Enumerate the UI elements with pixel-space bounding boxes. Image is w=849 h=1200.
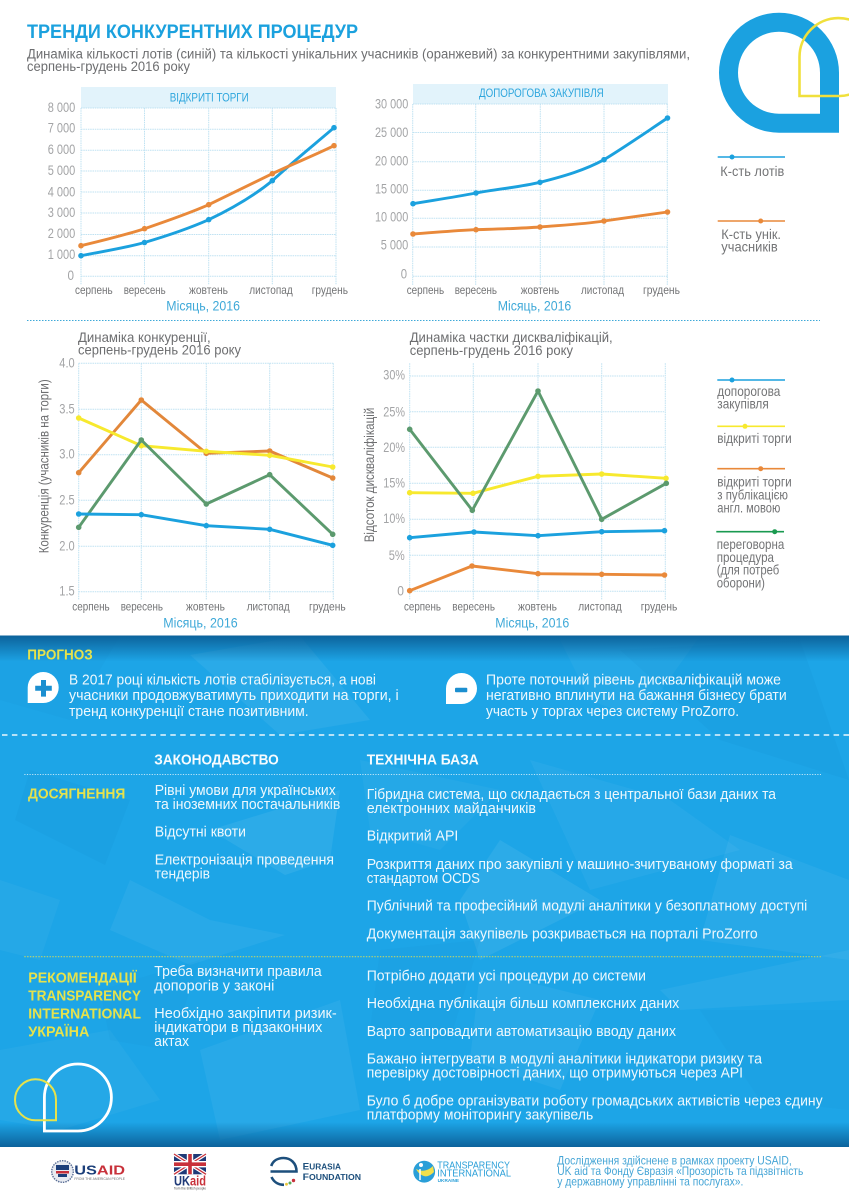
line: open tenders [76,415,336,470]
logo: USAID [52,1161,126,1182]
chart header: open tenders: ВІДКРИТІ ТОРГИ [170,93,249,105]
month labels: серпень [75,284,113,297]
legend item: unique participants: К-сть унік. [721,226,781,242]
achievements: technical base: Гібридна система, що складається з центральної бази даних та [367,787,777,803]
row heading: recommendations: УКРАЇНА [28,1023,89,1040]
recommendations: legislation [154,964,337,1050]
month labels: жовтень [186,601,225,614]
x axis title: Місяць, 2016 [495,615,570,630]
y axis labels: 1.5 [59,583,75,598]
recommendations: legislation: індикатори в підзаконних [154,1020,323,1036]
y axis title: Відсоток дискваліфікацій [362,408,377,542]
chart title: Динаміка конкуренції, [78,329,211,345]
legend item: unique participants [718,218,785,255]
logo: Transparency International Ukraine [413,1160,511,1183]
recommendations: technical base: перевірку достовірності даних, що отримуються через API [367,1066,743,1082]
legend item: open tenders with English publication: англ. мовою [717,499,780,515]
y axis labels [383,367,405,598]
y axis title: Конкуренція (учасників на торги) [37,379,52,553]
logo: blue and yellow drops [719,13,849,133]
forecast negative text [486,672,787,720]
legend: top charts [718,154,785,255]
x axis title: Місяць, 2016 [498,299,572,314]
line: open tenders with English publication [76,397,336,481]
month labels: жовтень [521,284,559,297]
legend item: unique participants: учасників [721,239,778,255]
chart: disqualification share [362,329,677,630]
logo: UK aid: UKaid [174,1173,206,1189]
y axis labels: 30% [383,367,405,382]
month labels: жовтень [518,601,557,614]
recommendations: technical base: Варто запровадити автоматизацію вводу даних [367,1024,677,1040]
line: lots [78,125,337,258]
row heading: achievements: ДОСЯГНЕННЯ [28,785,125,802]
logo: USAID: FROM THE AMERICAN PEOPLE [74,1177,126,1181]
chart title: Динаміка частки дискваліфікацій, [410,329,613,345]
row heading: recommendations: INTERNATIONAL [28,1006,141,1023]
line: below-threshold [407,528,667,540]
legend item: negotiated procedure: оборони) [717,574,765,590]
logo: Transparency International Ukraine: INTERNATIONAL [437,1169,511,1180]
month labels: вересень [121,601,163,614]
funding note [557,1154,803,1188]
forecast negative text: негативно вплинути на бажання бізнесу брати [486,688,787,704]
y axis labels: 3.5 [59,401,75,416]
achievements: technical base [367,787,807,943]
recommendations: legislation: Треба визначити правила [154,964,322,980]
achievements: legislation [155,783,341,882]
y axis labels: 5% [389,548,405,563]
recommendations: legislation: актах [154,1034,190,1050]
month labels: грудень [641,601,677,614]
recommendations: technical base: Необхідна публікація більш комплексних даних [367,996,680,1012]
y axis labels [375,97,408,282]
y axis labels: 6 000 [48,142,75,157]
y axis labels: 10% [383,511,405,526]
x axis title: Місяць, 2016 [163,615,238,630]
achievements: technical base: електронних майданчиків [367,801,536,817]
logo: Eurasia Foundation: EURASIA [303,1162,341,1173]
logo: UK aid [174,1154,206,1191]
line: negotiated procedure [76,437,336,537]
y axis labels: 2.5 [59,492,75,507]
achievements: technical base: Документація закупівель розкривається на порталі ProZorro [367,927,758,943]
column heading: legislation: ЗАКОНОДАВСТВО [154,753,279,769]
chart title: серпень-грудень 2016 року [78,342,241,358]
month labels: вересень [455,284,497,297]
legend: procedures [716,378,792,590]
month labels: вересень [452,601,495,614]
chart: below-threshold procurement [375,84,680,314]
month labels: серпень [407,284,444,297]
achievements: legislation: та іноземних постачальників [155,797,341,813]
y axis labels: 4.0 [59,356,75,371]
y axis labels: 15% [383,475,405,490]
y axis labels: 4 000 [48,184,75,200]
logo: USAID: US AID [74,1162,125,1177]
y axis labels: 20% [383,440,405,455]
column heading: technical base: ТЕХНІЧНА БАЗА [367,753,479,769]
y axis labels: 5 000 [48,163,75,178]
legend item: lots: К-сть лотів [720,163,784,179]
month labels [75,284,348,297]
chart title: серпень-грудень 2016 року [410,342,573,358]
line: lots [410,115,670,206]
legend item: open tenders: відкриті торги [717,430,792,446]
panel: forecast, achievements and recommendations [0,636,849,1147]
line: unique participants [78,143,337,248]
achievements: legislation: Рівні умови для українських [155,783,336,799]
legend item: below-threshold: закупівля [717,396,769,412]
chart title [78,329,241,358]
achievements: legislation: Відсутні квоти [155,825,246,841]
y axis labels: 25 000 [375,125,408,140]
recommendations: technical base: Потрібно додати усі процедури до системи [367,968,646,984]
month labels [404,601,677,614]
month labels: грудень [309,601,346,614]
legend item: below-threshold [717,378,785,412]
subtitle: Динаміка кількості лотів (синій) та кількості унікальних учасників (оранжевий) за конкурентними закупівлями, [27,46,690,62]
legend item: negotiated procedure [716,529,784,590]
recommendations: technical base: платформу моніторингу закупівель [367,1108,593,1124]
month labels: грудень [643,284,680,297]
line: below-threshold [76,511,336,548]
icon: minus [446,673,477,704]
row heading: recommendations: РЕКОМЕНДАЦІЇ [28,970,137,987]
subtitle [27,46,690,75]
line: negotiated procedure [407,388,669,522]
logo: Transparency International Ukraine: TRANSPARENCY [437,1160,510,1171]
month labels: серпень [72,601,110,614]
footer: partner logos [52,1154,803,1191]
recommendations: legislation: Необхідно закріпити ризик- [154,1006,337,1022]
funding note: у державному управлінні та послугах». [557,1174,743,1188]
month labels: серпень [404,601,441,614]
chart header: below-threshold: ДОПОРОГОВА ЗАКУПІВЛЯ [479,88,604,100]
legend item: negotiated procedure: процедура [717,549,774,565]
logo: Eurasia Foundation: FOUNDATION [303,1172,361,1183]
y axis labels: 1 000 [48,247,75,262]
achievements: technical base: Публічний та професійний модулі аналітики у безоплатному доступі [367,899,807,915]
y axis labels: 0 [397,583,404,598]
y axis labels: 7 000 [48,120,75,135]
chart title [410,329,613,358]
y axis labels: 25% [383,405,405,420]
forecast negative text: Проте поточний рівень дискваліфікацій може [486,672,781,688]
y axis labels: 10 000 [375,210,408,225]
line: unique participants [410,209,670,237]
achievements: technical base: стандартом OCDS [367,871,480,887]
y axis labels: 0 [401,267,407,282]
month labels: листопад [578,601,622,614]
subtitle: серпень-грудень 2016 року [27,59,191,75]
achievements: technical base: Розкриття даних про закупівлі у машино-зчитуваному форматі за [367,857,794,873]
achievements: technical base: Відкритий API [367,829,458,845]
legend item: negotiated procedure: переговорна [717,536,784,552]
legend item: below-threshold: допорогова [717,383,780,399]
month labels [72,601,346,614]
legend item: open tenders [717,424,792,446]
month labels: вересень [124,284,166,297]
month labels: листопад [247,601,290,614]
achievements: legislation: Електронізація проведення [155,852,334,868]
month labels: листопад [249,284,293,297]
legend item: open tenders with English publication: з публікацією [717,486,788,502]
month labels: жовтень [189,284,228,297]
month labels [407,284,680,297]
chart: open tenders [48,87,348,314]
achievements: legislation: тендерів [155,866,210,882]
logo: Eurasia Foundation [270,1158,361,1186]
forecast positive text: учасники продовжуватимуть приходити на торги, і [69,688,399,704]
icon: plus [28,672,59,703]
logo: Transparency International Ukraine: UKRAINE [438,1178,459,1183]
y axis labels: 8 000 [48,100,75,115]
month labels: грудень [312,284,348,297]
y axis labels: 5 000 [381,238,408,253]
forecast positive text [69,672,399,720]
x axis title: Місяць, 2016 [166,299,240,314]
y axis labels: 3 000 [48,205,75,220]
forecast negative text: участь у торгах через систему ProZorro. [486,704,739,720]
month labels: листопад [581,284,624,297]
forecast positive text: В 2017 році кількість лотів стабілізується, а нові [69,672,376,688]
legend item: open tenders with English publication: відкриті торги [717,474,792,490]
recommendations: legislation: допорогів у законі [154,979,274,995]
forecast heading: ПРОГНОЗ [27,647,93,664]
y axis labels [48,100,75,283]
forecast positive text: тренд конкуренції стане позитивним. [69,704,309,720]
y axis labels: 0 [68,268,74,283]
y axis labels: 2 000 [48,226,75,241]
legend item: negotiated procedure: (для потреб [717,562,779,578]
y axis labels: 20 000 [375,154,408,169]
y axis labels [59,356,75,598]
logo: UK aid: from the British people [174,1187,206,1191]
recommendations: technical base: Бажано інтегрувати в модулі аналітики індикатори ризику та [367,1052,763,1068]
line: open tenders with English publication [407,563,667,594]
chart: competition dynamics [37,329,346,630]
recommendations: technical base: Було б добре організувати роботу громадських активістів через єдину [367,1094,823,1110]
funding note: UK aid та Фонду Євразія «Прозорість та підзвітність [557,1164,803,1178]
legend item: open tenders with English publication [717,466,792,515]
logo: white and yellow drops [15,1064,111,1131]
y axis labels: 30 000 [375,97,408,112]
row heading: recommendations [28,970,141,1040]
funding note: Дослідження здійснене в рамках проекту USAID, [557,1154,792,1168]
y axis labels: 2.0 [59,538,75,553]
y axis labels: 3.0 [59,447,75,462]
line: open tenders [407,471,669,496]
recommendations: technical base [367,968,823,1124]
row heading: recommendations: TRANSPARENCY [28,988,141,1005]
title: ТРЕНДИ КОНКУРЕНТНИХ ПРОЦЕДУР [27,21,358,43]
y axis labels: 15 000 [375,182,408,197]
